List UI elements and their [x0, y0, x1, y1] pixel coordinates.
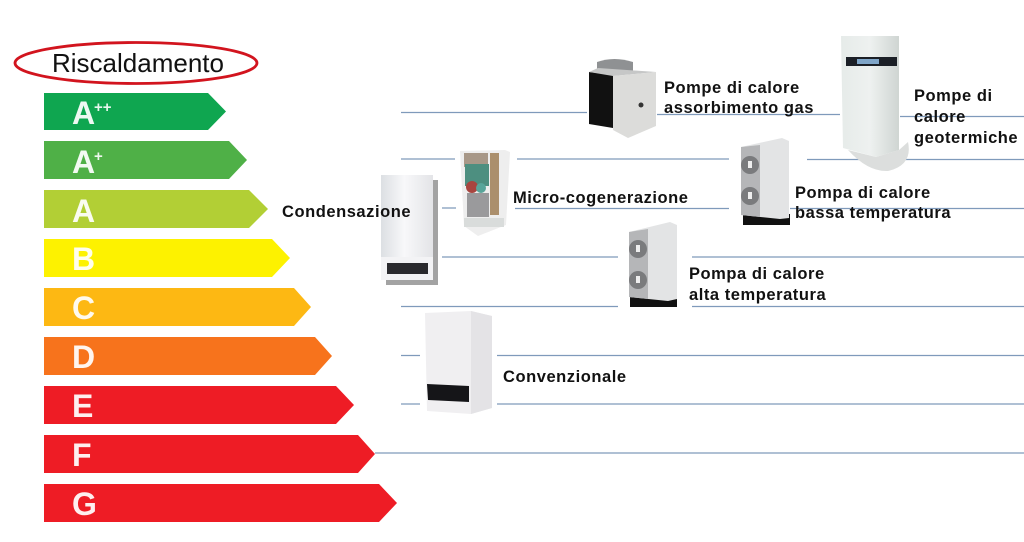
class C arrow: C — [72, 290, 95, 326]
label: Pompa di calore bassa temperatura: bassa temperatura — [795, 204, 951, 222]
class B arrow: B — [72, 241, 95, 277]
label: Pompa di calore bassa temperatura: Pompa di calore — [795, 184, 931, 202]
icon: geothermal heat pump — [841, 36, 909, 171]
label: Pompe di calore assorbimento gas: assorbimento gas — [664, 99, 814, 117]
title: Riscaldamento in red ellipse — [15, 42, 257, 84]
class B arrow — [44, 239, 290, 277]
energy class scale — [44, 93, 397, 522]
title: Riscaldamento in red ellipse: Riscaldamento — [52, 48, 224, 78]
label: Condensazione: Condensazione — [282, 203, 411, 221]
label: Pompa di calore alta temperatura: alta temperatura — [689, 286, 826, 304]
label: Pompe di calore assorbimento gas: Pompe di calore — [664, 79, 800, 97]
label: Micro-cogenerazione: Micro-cogenerazione — [513, 189, 688, 207]
class G arrow — [44, 484, 397, 522]
label: Pompe di calore geotermiche: geotermiche — [914, 129, 1018, 147]
class E arrow: E — [72, 388, 93, 424]
icon: micro-cogeneration unit — [460, 150, 510, 236]
label: Pompe di calore geotermiche: Pompe di — [914, 87, 993, 105]
label: Pompa di calore alta temperatura: Pompa di calore — [689, 265, 825, 283]
label: Pompe di calore geotermiche: calore — [914, 108, 966, 126]
class A++ arrow: A — [72, 95, 95, 131]
icon: low temperature heat pump — [741, 138, 790, 225]
class D arrow — [44, 337, 332, 375]
icon: conventional boiler — [425, 311, 492, 414]
class A+ arrow: + — [94, 148, 103, 165]
class F arrow: F — [72, 437, 92, 473]
class A+ arrow — [44, 141, 247, 180]
class A+ arrow: A — [72, 144, 95, 180]
icon: condensing boiler — [381, 175, 438, 285]
class F arrow — [44, 435, 375, 473]
class A arrow: A — [72, 193, 95, 229]
class A++ arrow — [44, 93, 226, 131]
class A++ arrow: ++ — [94, 99, 112, 116]
icon: gas absorption heat pump — [589, 59, 656, 138]
class E arrow — [44, 386, 354, 424]
class D arrow: D — [72, 339, 95, 375]
class A arrow — [44, 190, 268, 229]
icon: high temperature heat pump — [629, 222, 677, 307]
class G arrow: G — [72, 486, 97, 522]
label: Convenzionale: Convenzionale — [503, 368, 627, 386]
class C arrow — [44, 288, 311, 326]
